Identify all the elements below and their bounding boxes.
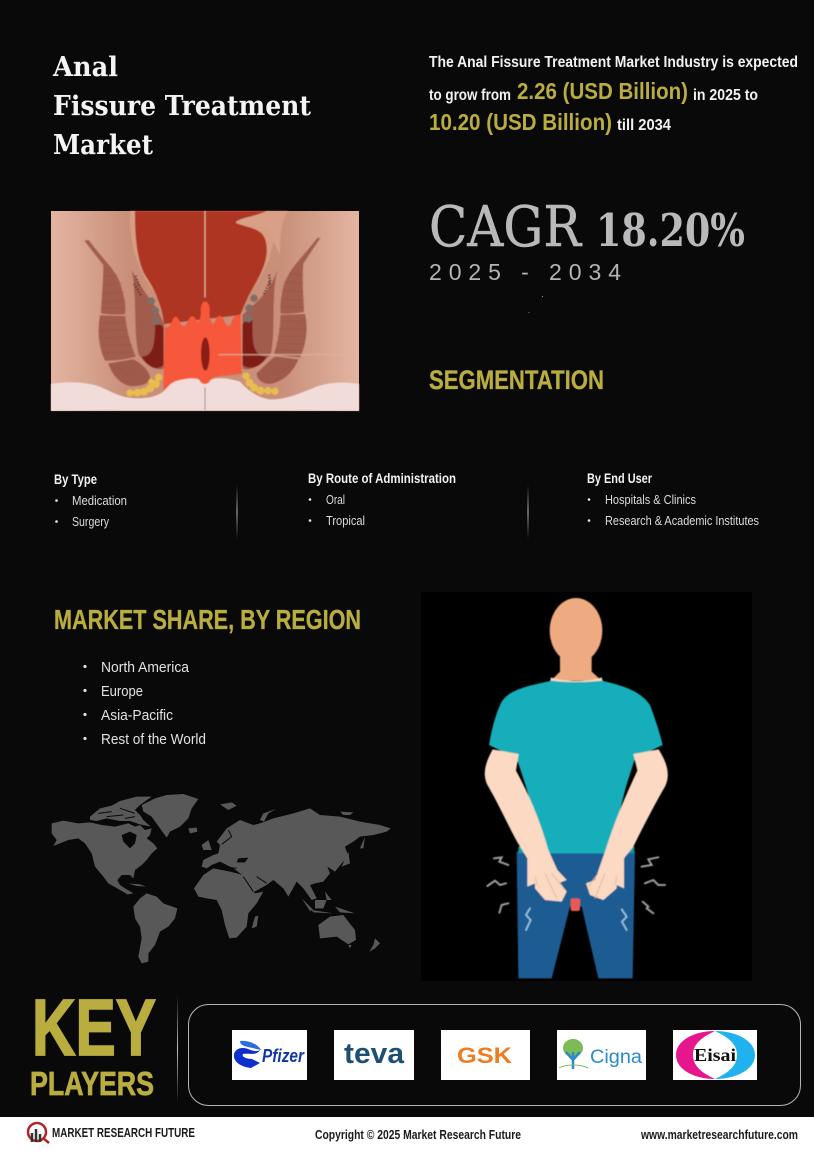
right internal sphincter — [243, 270, 277, 369]
heading: segmentation: SEGMENTATION — [429, 365, 604, 395]
market growth statement: till 2034 — [617, 117, 671, 134]
segment: by end user: Hospitals & Clinics — [605, 493, 696, 507]
left internal sphincter — [132, 270, 164, 369]
segment: by end user: Research & Academic Institutes — [605, 514, 759, 528]
logo: cigna — [557, 1030, 646, 1080]
shirt hem area — [518, 847, 634, 853]
segment: by type: By Type — [54, 472, 97, 487]
logo: pfizer — [232, 1030, 307, 1080]
rectum outer wall — [130, 211, 288, 324]
logo: gsk: GSK — [457, 1043, 512, 1068]
world map — [52, 794, 391, 963]
footer brand: MARKET RESEARCH FUTURE — [52, 1126, 195, 1140]
segment: by route of administration: By Route of Administration — [308, 471, 456, 486]
right external muscle — [280, 237, 321, 314]
southeast asia islands — [315, 900, 327, 908]
rectal lumen — [135, 211, 267, 324]
footer — [0, 1117, 814, 1150]
logo: teva — [334, 1030, 414, 1080]
left external muscle — [84, 240, 125, 314]
shirt — [489, 681, 663, 853]
market growth statement: in 2025 to — [693, 87, 758, 104]
anal canal — [163, 302, 242, 390]
CAGR figure: CAGR — [429, 195, 583, 260]
footer logo icon — [28, 1123, 49, 1143]
CAGR figure — [429, 195, 745, 285]
segment: by type: Medication — [72, 494, 127, 508]
logo: cigna: Cigna — [590, 1047, 642, 1068]
neck — [551, 653, 602, 681]
heading: key players: KEY — [32, 983, 156, 1072]
title: Market — [53, 130, 153, 161]
fat deposits — [126, 372, 279, 397]
south america — [133, 893, 177, 963]
market growth statement: 2.26 (USD Billion) — [517, 78, 688, 104]
muscle striations — [99, 273, 306, 378]
pointer lines — [218, 353, 357, 357]
region list — [83, 659, 206, 748]
right arm and hand — [586, 749, 668, 900]
pain spot — [571, 898, 580, 911]
eurasia — [202, 808, 391, 900]
CAGR figure: 2025 - 2034 — [429, 259, 621, 285]
north america — [52, 821, 157, 894]
illustration: person — [421, 592, 752, 981]
center line — [203, 211, 207, 297]
logo: eisai: Eisai — [694, 1045, 736, 1065]
region list: North America — [101, 659, 190, 676]
segment: by type: Surgery — [72, 515, 110, 529]
logo: eisai — [673, 1030, 757, 1080]
segment: by route of administration: Oral — [326, 493, 345, 507]
logo: pfizer: Pfizer — [262, 1046, 305, 1066]
copyright: Copyright © 2025 Market Research Future — [315, 1128, 521, 1142]
title — [52, 52, 311, 161]
region list: Rest of the World — [101, 731, 206, 748]
australia — [318, 915, 356, 944]
slit — [201, 337, 210, 371]
title: Fissure Treatment — [53, 91, 311, 122]
heading: key players — [30, 983, 156, 1102]
head — [550, 598, 602, 663]
left arm and hand — [485, 749, 567, 902]
segment: by route of administration — [308, 471, 456, 528]
squiggles — [487, 857, 665, 913]
africa — [194, 868, 263, 938]
market growth statement: 10.20 (USD Billion) — [429, 109, 612, 135]
logo: teva: teva — [344, 1038, 405, 1070]
black dots — [134, 276, 142, 297]
region list: Europe — [101, 683, 143, 700]
rectal vessel fold — [235, 211, 288, 255]
segment: by end user: By End User — [587, 471, 653, 486]
key players panel — [188, 1004, 800, 1106]
skin surface — [51, 378, 359, 411]
title: Anal — [52, 52, 118, 83]
jeans — [517, 852, 635, 978]
market growth statement: to grow from — [429, 87, 511, 104]
greenland — [142, 794, 198, 838]
heading: market share by region: MARKET SHARE, BY REGION — [54, 604, 361, 635]
CAGR figure: 18.20% — [596, 204, 745, 257]
segment: by type — [54, 472, 127, 529]
region list: Asia-Pacific — [101, 707, 173, 724]
market growth statement — [429, 54, 798, 135]
segment: by end user — [587, 471, 759, 528]
logo: gsk — [441, 1030, 530, 1080]
heading: key players: PLAYERS — [30, 1065, 154, 1102]
illustration: anatomy — [51, 211, 359, 411]
segment: by route of administration: Tropical — [326, 514, 365, 528]
